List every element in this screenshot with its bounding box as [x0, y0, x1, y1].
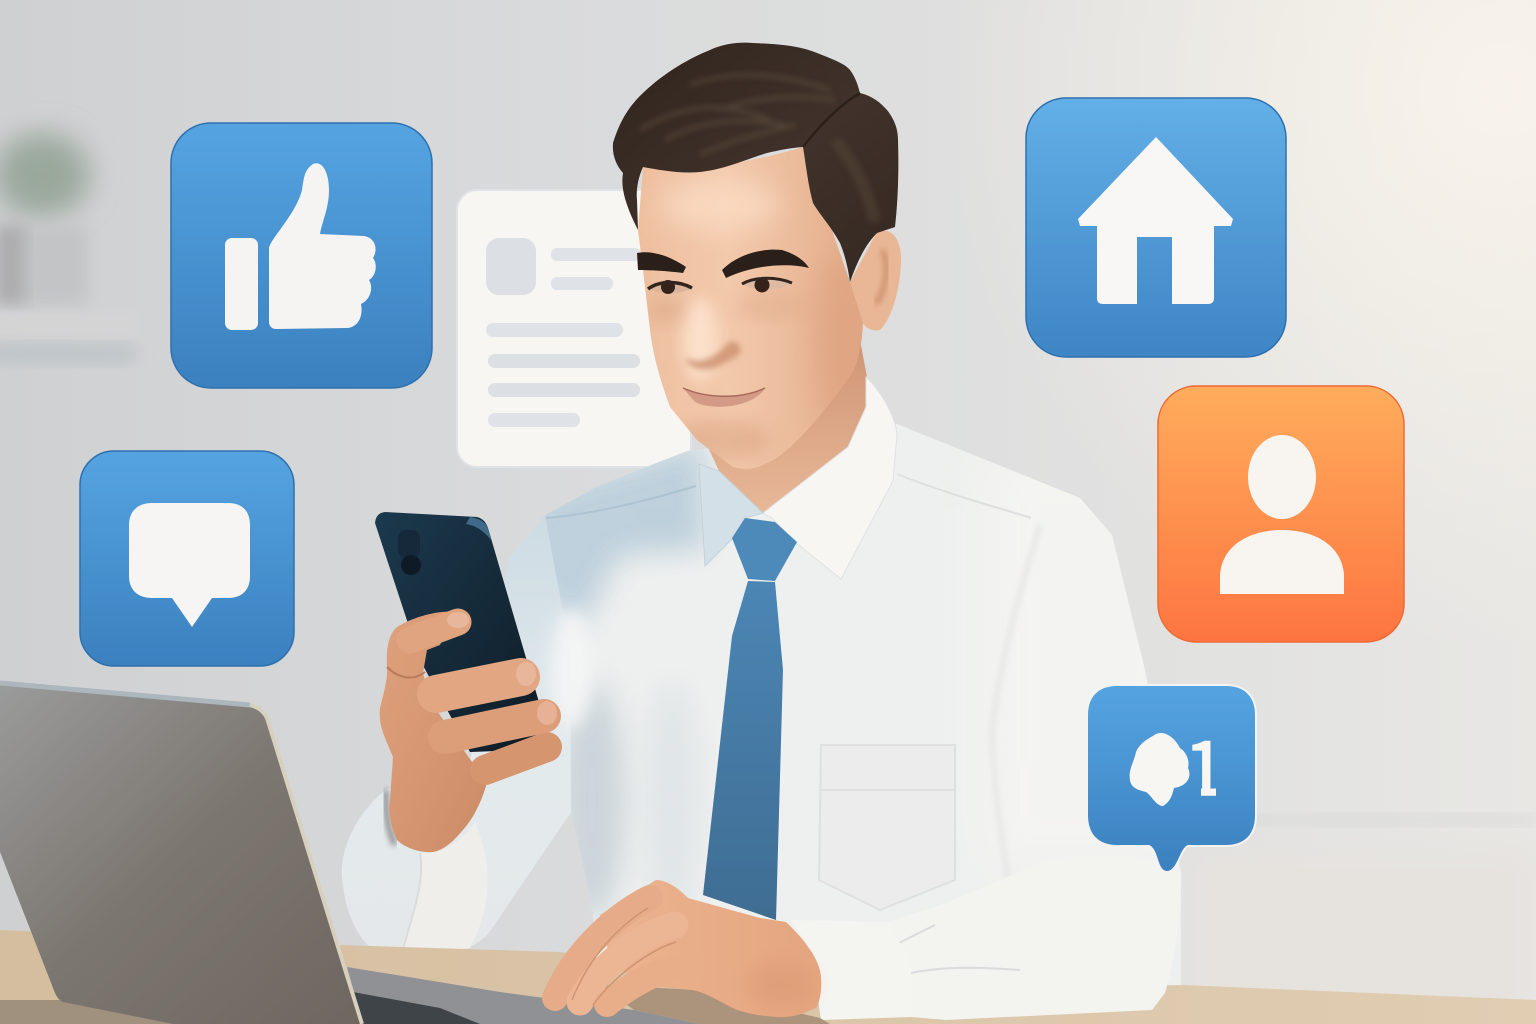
icon: notification badge: 1	[1184, 708, 1226, 817]
blurred plant on shelf	[0, 133, 140, 363]
hand on laptop	[555, 880, 821, 1017]
left eye	[648, 280, 692, 294]
person: face	[637, 147, 866, 469]
table	[0, 930, 1536, 1024]
shirt pocket	[819, 745, 955, 910]
shirt cuff	[790, 920, 911, 1020]
right eyebrow	[722, 250, 809, 278]
right sleeve	[888, 854, 1181, 1020]
person: torso and shirt	[545, 424, 1181, 985]
person: ear	[850, 231, 901, 330]
necktie	[703, 518, 797, 920]
mouth	[683, 388, 765, 407]
laptop base	[347, 967, 830, 1024]
laptop lid	[0, 683, 362, 1024]
person: hair	[613, 43, 898, 282]
left sleeve	[342, 515, 594, 958]
laptop	[0, 683, 830, 1024]
hand holding phone	[380, 612, 557, 852]
person: neck	[700, 340, 867, 513]
icon: document card	[457, 190, 691, 467]
right eye	[742, 278, 792, 292]
shirt collar	[699, 377, 897, 579]
phone	[375, 512, 548, 752]
nose shadow	[685, 341, 741, 369]
icon: thumbs up	[171, 123, 432, 388]
icon: user profile	[1158, 386, 1404, 642]
icon: notification badge	[1087, 685, 1256, 872]
icon: chat bubble	[80, 451, 294, 666]
icon: house	[1026, 98, 1286, 357]
left eyebrow	[637, 252, 686, 273]
